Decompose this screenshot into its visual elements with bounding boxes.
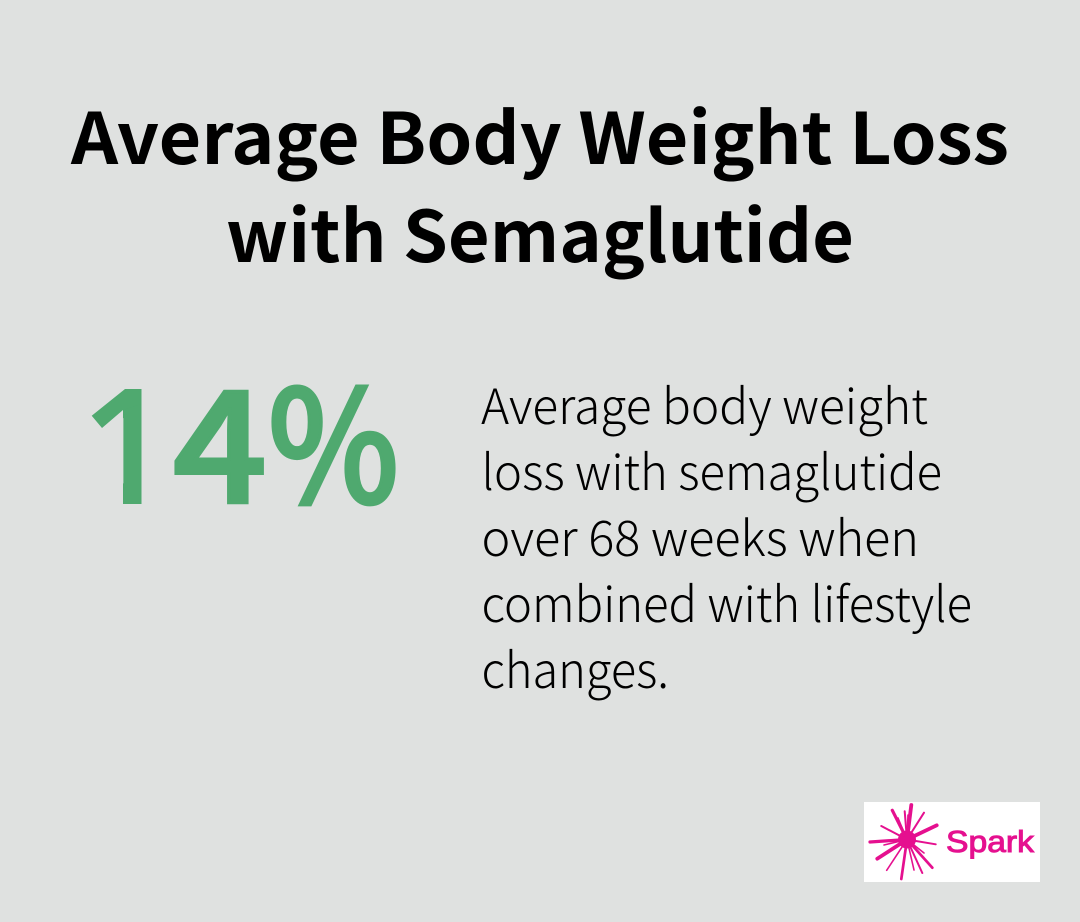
description text: changes.	[482, 632, 669, 703]
title	[70, 83, 1009, 283]
statistic: 14%: %	[268, 322, 399, 548]
statistic: 14%	[92, 384, 396, 506]
statistic: 14%: 4	[173, 322, 267, 548]
logo wordmark: Spark	[946, 824, 1035, 859]
description text: combined with lifestyle	[482, 566, 972, 637]
logo: Spark	[864, 802, 1040, 882]
statistic: 14%: 1	[90, 324, 176, 549]
description text: Average body weight	[481, 368, 928, 439]
description text: loss with semaglutide	[482, 434, 942, 505]
title: Average Body Weight Loss	[70, 83, 1009, 185]
title: with Semaglutide	[226, 181, 854, 283]
description text: over 68 weeks when	[482, 500, 919, 571]
icon: starburst	[870, 805, 937, 879]
description text	[481, 368, 972, 703]
